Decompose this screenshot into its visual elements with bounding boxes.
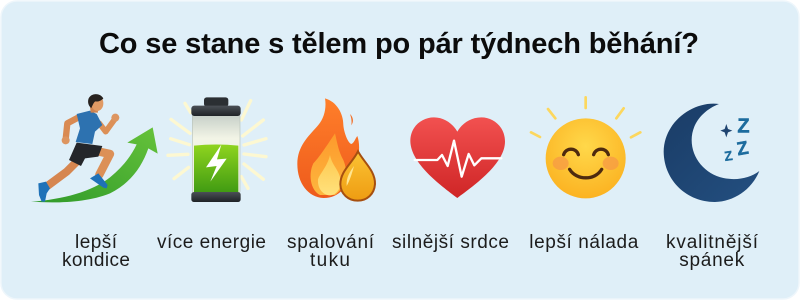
runner back shoe (38, 182, 50, 202)
runner front arm (99, 119, 115, 132)
base (191, 192, 241, 202)
label: lepší kondice: kondice (62, 250, 130, 271)
bolt (206, 145, 227, 182)
label: kvalitnější spánek: kvalitnější (666, 232, 759, 253)
label: kvalitnější spánek (666, 232, 759, 271)
rising green arrow (31, 127, 158, 202)
runner back fist (62, 136, 70, 144)
green charge (194, 144, 238, 193)
label: lepší nálada: lepší nálada (529, 232, 639, 253)
small z: Z (723, 148, 733, 164)
runner neck (90, 105, 98, 113)
lid (191, 106, 241, 116)
label: silnější srdce: silnější srdce (392, 232, 509, 253)
spark (350, 114, 353, 125)
sun face (546, 118, 626, 198)
energy rays (168, 101, 266, 188)
icon: runner on rising arrow (31, 94, 158, 202)
label: kvalitnější spánek: spánek (679, 250, 745, 271)
icon: crescent moon with zzz (664, 104, 759, 202)
label: spalování tuku: spalování (287, 232, 375, 253)
icon: flame with fat drop (297, 98, 375, 201)
star (720, 124, 732, 137)
eyes and smile (564, 149, 608, 178)
runner shirt (76, 111, 102, 144)
inner flame (318, 155, 341, 195)
runner shorts (69, 143, 102, 166)
icon: battery (168, 97, 266, 202)
cap (204, 97, 228, 107)
label: lepší kondice (62, 232, 130, 271)
sun rays (531, 97, 640, 137)
icon: smiling sun (531, 97, 640, 198)
runner front shoe (90, 173, 108, 188)
runner back leg (47, 162, 77, 186)
pulse line (415, 141, 501, 177)
runner front fist (111, 114, 119, 122)
fat drop (340, 151, 375, 201)
label: lepší kondice: lepší (75, 232, 118, 253)
runner hair (88, 94, 103, 108)
heart (410, 117, 505, 198)
runner head (91, 96, 103, 111)
drop highlight (347, 166, 354, 186)
middle flame (311, 133, 346, 195)
icon: heart with pulse line (410, 117, 505, 198)
glass (192, 115, 240, 193)
title: Co se stane s tělem po pár týdnech běhání? (99, 28, 699, 60)
label: spalování tuku (287, 232, 375, 271)
runner back arm (66, 117, 79, 139)
outer flame (297, 98, 359, 198)
large z: Z (737, 115, 750, 137)
runner front leg (95, 151, 110, 175)
label: více energie: více energie (157, 232, 266, 253)
cheeks (553, 157, 569, 170)
label: spalování tuku: tuku (310, 250, 350, 271)
medium z: Z (735, 137, 750, 159)
moon (664, 104, 759, 202)
